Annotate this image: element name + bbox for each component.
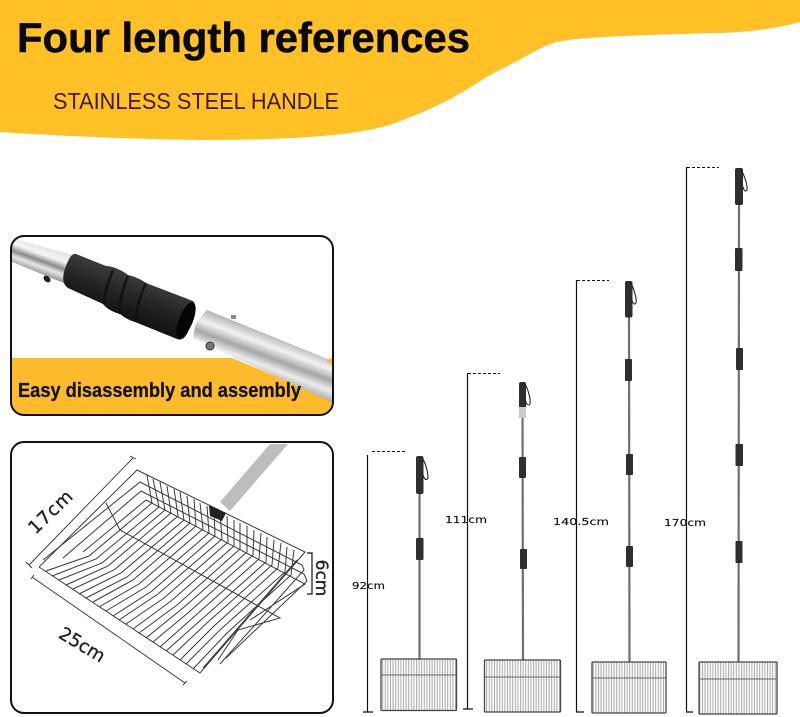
25cm bracket [31, 575, 187, 685]
sleeve ridges [104, 270, 146, 322]
sleeve one [735, 248, 742, 271]
wrist loop [630, 282, 636, 304]
pole [521, 405, 524, 662]
basket [381, 659, 456, 710]
top dash [687, 166, 719, 168]
sleeve upper [519, 457, 526, 478]
subtitle: STAINLESS STEEL HANDLE [53, 88, 339, 114]
grip [625, 281, 632, 318]
25cm label: 25cm [55, 623, 109, 667]
sleeve [416, 538, 424, 560]
wrist loop [740, 168, 747, 191]
top pin [231, 315, 236, 319]
6cm bracket [307, 553, 312, 594]
basket bar [381, 674, 456, 676]
sleeve opening [172, 300, 200, 340]
right steel tube [193, 310, 340, 406]
wrist loop [524, 383, 530, 405]
pole [737, 203, 740, 662]
basket [699, 662, 777, 714]
sleeve lower [520, 549, 527, 569]
caption: Easy disassembly and assembly [18, 380, 302, 402]
measure line [686, 167, 693, 712]
6cm label: 6cm [311, 560, 331, 596]
sleeve one [625, 359, 632, 381]
pole [418, 490, 421, 660]
17cm label: 17cm [24, 486, 78, 538]
sleeve two [626, 454, 633, 475]
length label: 92cm [352, 581, 385, 592]
silver section [519, 407, 526, 418]
length label: 170cm [664, 518, 706, 529]
top dash [372, 450, 405, 452]
spring pin [206, 342, 214, 350]
yellow header banner [0, 0, 800, 140]
scoop 111cm [445, 373, 560, 712]
measure line [363, 455, 373, 712]
top dash [468, 372, 500, 374]
wire basket [39, 470, 307, 673]
basket bar [592, 677, 666, 679]
scoop 140.5cm [553, 280, 666, 713]
pole [628, 315, 631, 663]
basket [484, 660, 560, 712]
grip [519, 382, 526, 408]
handle clip [209, 505, 226, 521]
top dash [577, 280, 609, 282]
wrist loop [421, 457, 428, 480]
tube hole [42, 274, 52, 284]
yellow caption strip [11, 358, 333, 415]
sleeve two [736, 348, 743, 370]
left steel tube [12, 240, 72, 284]
yellow sliver [326, 358, 332, 365]
basket [592, 662, 666, 713]
sleeve four [736, 541, 742, 563]
scoop 92cm [352, 452, 456, 712]
17cm bracket [26, 456, 136, 568]
sleeve three [736, 444, 743, 466]
basket bar [485, 676, 560, 678]
black rubber sleeve [63, 254, 195, 340]
handle stub [220, 444, 288, 511]
panel border [11, 236, 333, 415]
length label: 111cm [445, 515, 487, 526]
panel: scoop dimensions [11, 442, 333, 713]
measure line [576, 280, 584, 712]
length label: 140.5cm [553, 517, 609, 528]
panel: easy assembly photo [5, 236, 340, 415]
title: Four length references [17, 14, 470, 61]
basket bar [699, 678, 777, 680]
grip [416, 456, 424, 494]
sleeve three [626, 546, 633, 567]
scoop 170cm [664, 167, 777, 714]
grip [735, 168, 743, 205]
measure line [463, 373, 473, 709]
